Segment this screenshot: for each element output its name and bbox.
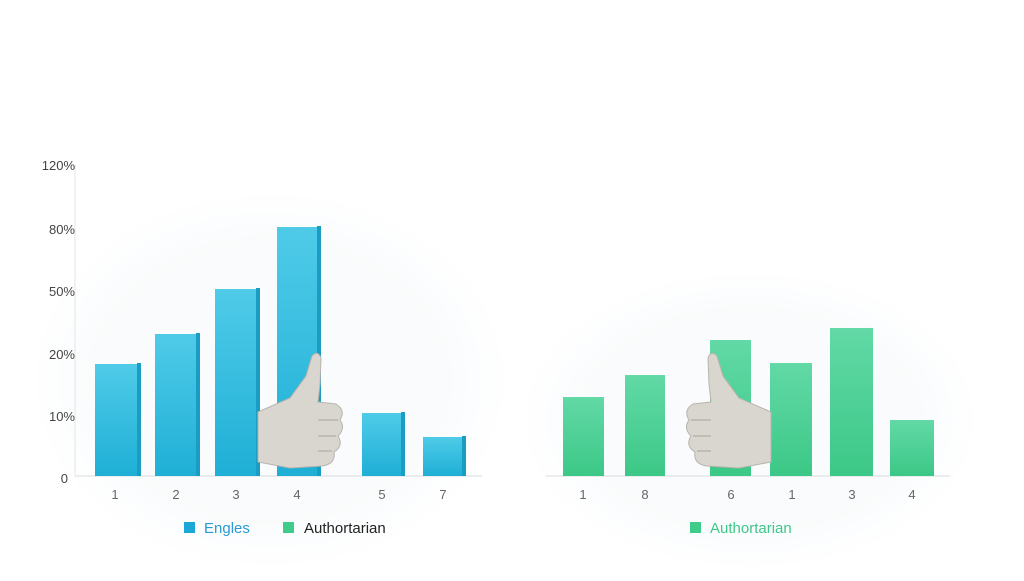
y axis labels: 10% bbox=[49, 409, 75, 424]
x labels left: 3 bbox=[232, 487, 240, 502]
x labels left bbox=[111, 487, 447, 502]
x labels left: 7 bbox=[439, 487, 447, 502]
x labels right bbox=[579, 487, 916, 502]
y axis labels bbox=[42, 158, 75, 486]
x labels right: 1 bbox=[788, 487, 796, 502]
x labels right: 8 bbox=[641, 487, 649, 502]
legend left: Authortarian bbox=[304, 520, 386, 537]
legend right: Authortarian bbox=[710, 520, 792, 537]
x labels left: 2 bbox=[172, 487, 180, 502]
icon: thumbs up hand left bbox=[258, 353, 343, 468]
x labels left: 4 bbox=[293, 487, 301, 502]
x labels right: 3 bbox=[848, 487, 856, 502]
legend left bbox=[184, 520, 386, 537]
panel: left chart bbox=[30, 158, 510, 570]
y axis labels: 80% bbox=[49, 222, 75, 237]
x labels left: 5 bbox=[378, 487, 386, 502]
icon: thumbs up hand right bbox=[686, 353, 771, 468]
panel: right chart bbox=[520, 270, 980, 570]
y axis labels: 20% bbox=[49, 347, 75, 362]
legend left: Engles bbox=[204, 520, 250, 537]
x labels right: 4 bbox=[908, 487, 916, 502]
y axis labels: 50% bbox=[49, 284, 75, 299]
x labels left: 1 bbox=[111, 487, 119, 502]
x labels right: 1 bbox=[579, 487, 587, 502]
y axis labels: 120% bbox=[42, 158, 75, 173]
y axis labels: 0 bbox=[61, 471, 68, 486]
x labels right: 6 bbox=[727, 487, 735, 502]
bars: blue bbox=[95, 226, 466, 476]
bars: green bbox=[563, 328, 934, 476]
